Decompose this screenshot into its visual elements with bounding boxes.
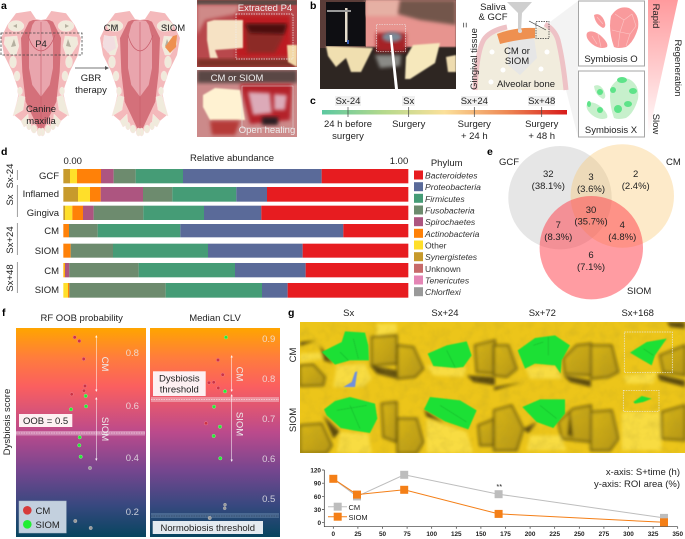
plot: median CLV: Normobiosis threshold bbox=[161, 523, 255, 534]
legend: phylum: Tenericutes bbox=[425, 276, 470, 286]
panel e: venn diagram: 30 bbox=[586, 205, 596, 216]
plot: RF OOB probability: 0.6 bbox=[126, 401, 139, 412]
ROI area line chart: x-axis: S+time (h) bbox=[606, 467, 680, 478]
legend: phylum: Chlorflexi bbox=[425, 287, 462, 297]
plot: median CLV: Dysbiosis bbox=[159, 374, 200, 384]
panel letter a: a bbox=[1, 0, 7, 12]
ROI area line chart bbox=[310, 467, 683, 538]
plot: RF OOB probability: CM bbox=[36, 506, 50, 517]
panel d: stacked bar chart: Relative abundance bbox=[190, 153, 274, 164]
ROI area line chart: 125 bbox=[451, 531, 462, 538]
panel e: venn diagram: 7 bbox=[556, 220, 561, 231]
ROI area line chart: 175 bbox=[500, 531, 511, 538]
legend: phylum: Other bbox=[425, 240, 447, 250]
panel f: dysbiosis score plots bbox=[2, 307, 280, 537]
ROI area line chart: 200 bbox=[525, 531, 536, 538]
group labels: Sx+48 bbox=[5, 264, 16, 292]
panel c: surgery timeline: 24 h before bbox=[324, 119, 372, 130]
left canine maxilla with P4 box bbox=[1, 11, 82, 136]
ROI area line chart: SIOM bbox=[348, 513, 368, 522]
ROI area line chart: 100 bbox=[426, 531, 437, 538]
plot: median CLV: CM bbox=[234, 367, 244, 381]
stacked bars bbox=[63, 169, 408, 298]
panel e: venn diagram: SIOM bbox=[627, 286, 651, 297]
panel a: maxilla diagrams bbox=[1, 0, 185, 136]
row labels: Inflamed bbox=[23, 189, 59, 200]
panel e: venn diagram: (8.3%) bbox=[544, 232, 572, 243]
schematic: saliva, graft and bone: Saliva bbox=[480, 2, 507, 13]
panel c: surgery timeline: Sx-24 bbox=[336, 96, 360, 107]
legend: phylum: Bacteroidetes bbox=[425, 170, 478, 180]
plot: RF OOB probability: OOB = 0.5 bbox=[23, 416, 68, 427]
panel e: venn diagram: 32 bbox=[543, 169, 554, 180]
row labels bbox=[23, 171, 60, 296]
panel g: 3D scans: Sx+168 bbox=[621, 308, 654, 319]
plot: median CLV: threshold bbox=[160, 384, 199, 396]
symbiosis O box: Symbiosis O bbox=[584, 54, 638, 65]
panel d: stacked bar chart: 1.00 bbox=[390, 156, 408, 167]
schematic: saliva, graft and bone: = bbox=[459, 22, 470, 28]
ROI area line chart: 250 bbox=[574, 531, 585, 538]
plot: RF OOB probability bbox=[16, 313, 146, 537]
schematic: saliva, graft and bone: Gingival tissue bbox=[469, 28, 480, 90]
ROI area line chart: y-axis: ROI area (%) bbox=[594, 479, 680, 490]
ROI area line chart: 25 bbox=[354, 531, 362, 538]
photo: CM or SIOM bbox=[197, 70, 297, 137]
panel c: surgery timeline: + 24 h bbox=[461, 131, 488, 142]
panel g: 3D scans: Sx bbox=[343, 308, 354, 319]
regeneration triangle: Rapid bbox=[650, 4, 661, 28]
plot: median CLV: 0.8 bbox=[262, 374, 275, 385]
plot: median CLV: 0.6 bbox=[262, 454, 275, 465]
panel c: surgery timeline: Sx+48 bbox=[528, 96, 555, 107]
ROI area line chart: 150 bbox=[476, 531, 487, 538]
left canine maxilla with P4 box: maxilla bbox=[26, 116, 56, 127]
photo: extracted P4 bbox=[197, 0, 297, 67]
GBR therapy arrow: GBR bbox=[81, 73, 101, 84]
panel f: dysbiosis score plots: f bbox=[2, 307, 6, 319]
green regions of interest, last two columns bbox=[518, 335, 667, 428]
panel c: surgery timeline: + 48 h bbox=[528, 131, 555, 142]
ROI area line chart: 30 bbox=[314, 507, 321, 514]
scan shading: columns Sx and Sx+24 bbox=[300, 324, 495, 453]
ROI area line chart: 60 bbox=[314, 494, 321, 501]
schematic: saliva, graft and bone bbox=[459, 2, 567, 90]
panel c: surgery timeline: Surgery bbox=[458, 119, 491, 130]
dashed highlight boxes bbox=[623, 332, 672, 411]
ROI area line chart: 90 bbox=[314, 481, 321, 488]
group labels: Sx bbox=[5, 194, 16, 206]
panel c: surgery timeline bbox=[310, 95, 567, 142]
ROI area line chart: 120 bbox=[310, 468, 321, 474]
legend: phylum: Synergistetes bbox=[425, 252, 478, 262]
panel c: surgery timeline: Surgery bbox=[525, 119, 559, 130]
panel e: venn diagram: (7.1%) bbox=[577, 262, 605, 273]
photo: CM or SIOM: Open healing bbox=[239, 125, 295, 136]
legend: phylum: Firmicutes bbox=[425, 194, 465, 204]
plot: RF OOB probability: SIOM bbox=[36, 520, 60, 531]
panel c: surgery timeline: Sx+24 bbox=[461, 96, 488, 107]
ROI area line chart: CM bbox=[348, 503, 360, 512]
ROI area line chart: 0 bbox=[317, 520, 321, 527]
schematic: saliva, graft and bone: Alveolar bone bbox=[497, 79, 555, 90]
panel c: surgery timeline: Sx bbox=[403, 96, 414, 107]
fan between schematic and symbiosis boxes bbox=[550, 1, 578, 137]
group labels: Sx-24 bbox=[5, 164, 16, 188]
ROI area line chart: 350 bbox=[672, 531, 683, 538]
photo: extracted P4: Extracted P4 bbox=[238, 3, 292, 14]
plot: median CLV: 0.7 bbox=[262, 414, 275, 425]
panel e: venn diagram bbox=[487, 144, 681, 299]
panel g: 3D scans: Sx+72 bbox=[529, 308, 556, 319]
panel e: venn diagram: 6 bbox=[588, 250, 594, 261]
symbiosis O box bbox=[578, 1, 644, 66]
ROI area line chart: 0 bbox=[332, 531, 336, 538]
plot: RF OOB probability: 0.8 bbox=[126, 348, 139, 359]
row labels: SIOM bbox=[35, 246, 59, 257]
ROI area line chart: 50 bbox=[379, 531, 386, 538]
photo: CM or SIOM: CM or SIOM bbox=[211, 73, 263, 84]
regeneration triangle: Slow bbox=[650, 114, 661, 134]
ROI area line chart: 275 bbox=[599, 531, 610, 538]
GBR therapy arrow bbox=[75, 66, 109, 96]
right maxilla with grafts: SIOM bbox=[161, 23, 185, 34]
photo: saliva sampling bbox=[320, 0, 456, 89]
row labels: GCF bbox=[39, 171, 59, 182]
panel e: venn diagram: 2 bbox=[633, 169, 638, 180]
plot: RF OOB probability: 0.4 bbox=[126, 453, 139, 464]
panel e: venn diagram: (3.6%) bbox=[577, 184, 605, 195]
plot: median CLV: SIOM bbox=[234, 412, 244, 436]
schematic: saliva, graft and bone: CM or bbox=[504, 46, 530, 57]
legend: phylum: Unknown bbox=[425, 264, 461, 274]
legend: phylum: Fusobacteria bbox=[425, 206, 475, 216]
plot: RF OOB probability: RF OOB probability bbox=[41, 313, 123, 324]
panel b letter: b bbox=[310, 0, 316, 12]
regeneration triangle: Regeneration bbox=[672, 39, 683, 97]
legend: phylum bbox=[414, 158, 481, 297]
panel e: venn diagram: (38.1%) bbox=[532, 181, 565, 192]
ROI area line chart: 325 bbox=[648, 531, 659, 538]
right maxilla with grafts: CM bbox=[104, 23, 118, 34]
panel e: venn diagram: e bbox=[487, 146, 493, 158]
panel e: venn diagram: (2.4%) bbox=[622, 181, 650, 192]
panel e: venn diagram: (4.8%) bbox=[608, 232, 636, 243]
scan grid bbox=[300, 322, 685, 453]
panel d: stacked bar chart: d bbox=[1, 146, 7, 158]
panel e: venn diagram: 4 bbox=[620, 220, 625, 231]
green regions of interest, first two columns bbox=[322, 331, 477, 433]
panel c: surgery timeline: c bbox=[310, 95, 316, 107]
legend: phylum: Phylum bbox=[431, 158, 463, 169]
group labels bbox=[5, 164, 17, 293]
group labels: Sx+24 bbox=[5, 226, 16, 254]
legend: phylum: Spirochaetes bbox=[425, 217, 476, 227]
panel g: 3D scans: CM bbox=[288, 348, 299, 362]
panel e: venn diagram: GCF bbox=[499, 157, 519, 168]
panel f: dysbiosis score plots: Dysbiosis score bbox=[2, 389, 13, 455]
panel g: 3D scans: Sx+24 bbox=[431, 308, 459, 319]
panel g: 3D scans bbox=[288, 307, 685, 538]
panel c: surgery timeline: surgery bbox=[332, 131, 364, 142]
plot: median CLV bbox=[150, 313, 280, 537]
row labels: Gingiva bbox=[27, 208, 60, 219]
plot: RF OOB probability: CM bbox=[99, 357, 110, 371]
ROI area line chart: 75 bbox=[404, 531, 411, 538]
legend: phylum: Proteobacteria bbox=[425, 182, 481, 192]
panel e: venn diagram: (35.7%) bbox=[574, 216, 608, 228]
row labels: CM bbox=[44, 226, 59, 237]
left canine maxilla with P4 box: Canine bbox=[26, 104, 56, 115]
plot: RF OOB probability: 0.2 bbox=[126, 507, 139, 518]
panel e: venn diagram: CM bbox=[666, 157, 681, 168]
left canine maxilla with P4 box: P4 bbox=[35, 39, 47, 50]
ROI area line chart: ** bbox=[496, 482, 502, 491]
regeneration triangle bbox=[648, 0, 683, 137]
plot: median CLV: Median CLV bbox=[189, 313, 241, 324]
scan shading: columns Sx+72 and Sx+168 bbox=[494, 322, 685, 450]
right maxilla with grafts bbox=[100, 11, 185, 136]
plot: RF OOB probability: SIOM bbox=[99, 417, 110, 441]
row labels: CM bbox=[44, 266, 59, 277]
panel d: stacked bar chart bbox=[1, 146, 408, 298]
plot: median CLV: 0.5 bbox=[262, 494, 275, 505]
ROI area line chart: 300 bbox=[623, 531, 634, 538]
panel g: 3D scans: SIOM bbox=[288, 408, 299, 432]
legend: phylum: Actinobacteria bbox=[424, 229, 480, 239]
panel e: venn diagram: 3 bbox=[588, 172, 594, 183]
panel g: 3D scans: g bbox=[288, 307, 294, 319]
schematic: saliva, graft and bone: SIOM bbox=[505, 56, 529, 67]
panel c: surgery timeline: Surgery bbox=[392, 119, 426, 130]
GBR therapy arrow: therapy bbox=[75, 85, 107, 96]
symbiosis X box bbox=[578, 71, 644, 137]
row labels: SIOM bbox=[35, 285, 59, 296]
symbiosis X box: Symbiosis X bbox=[585, 125, 638, 136]
schematic: saliva, graft and bone: & GCF bbox=[478, 12, 508, 23]
plot: median CLV: 0.9 bbox=[262, 334, 275, 345]
panel d: stacked bar chart: 0.00 bbox=[63, 156, 82, 167]
ROI area line chart: 225 bbox=[549, 531, 560, 538]
